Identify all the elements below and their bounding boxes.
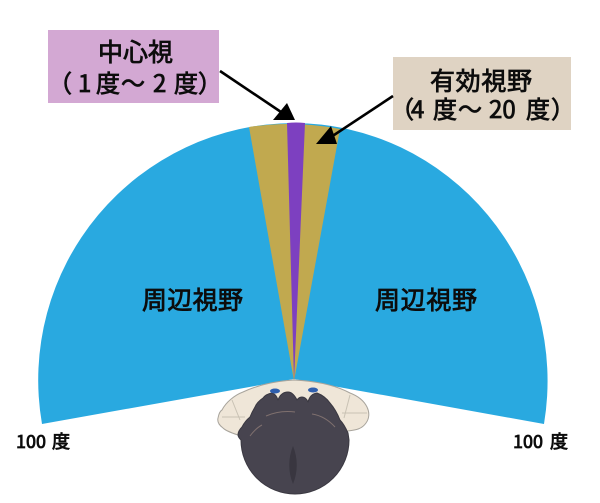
hair strands [250,412,335,436]
hair parting [289,446,297,484]
100 degree label left: 度 [52,428,70,454]
effective vision label [390,57,575,130]
arrow to effective vision [316,96,393,144]
central vision wedge [287,122,305,381]
shoulder seam lines [222,395,367,420]
effective vision label: ） [551,90,575,125]
central vision label: 1 [78,64,91,99]
effective vision label: 20 [489,90,516,125]
effective vision label: （ [390,90,414,125]
eye right [308,388,318,392]
effective vision label: 度 [433,90,457,125]
central vision label [48,30,222,103]
effective vision label: 度 [526,90,550,125]
central vision label: 2 [153,64,166,99]
central vision label: 中心視 [98,33,173,69]
peripheral label left: 周辺視野 [142,281,243,317]
central vision label: 度 [96,64,120,99]
effective vision wedge [249,124,340,381]
hair [238,392,349,494]
100 degree label left: 100 [16,428,46,454]
central vision label: ～ [121,64,145,99]
central vision label: 度 [174,64,198,99]
central vision label: ） [198,64,222,99]
effective vision label: 有効視野 [430,62,532,98]
effective vision label: 4 [411,90,424,125]
head viewed from above [218,380,369,494]
central vision label: （ [48,64,72,99]
eye left [270,388,280,394]
peripheral label right: 周辺視野 [375,281,477,317]
arrow to central vision [220,71,295,120]
100 degree label right: 度 [550,428,568,454]
100 degree label right: 100 [513,428,543,454]
effective vision label: ～ [458,90,482,125]
peripheral vision fan [38,123,548,424]
shoulders and face [218,380,369,435]
